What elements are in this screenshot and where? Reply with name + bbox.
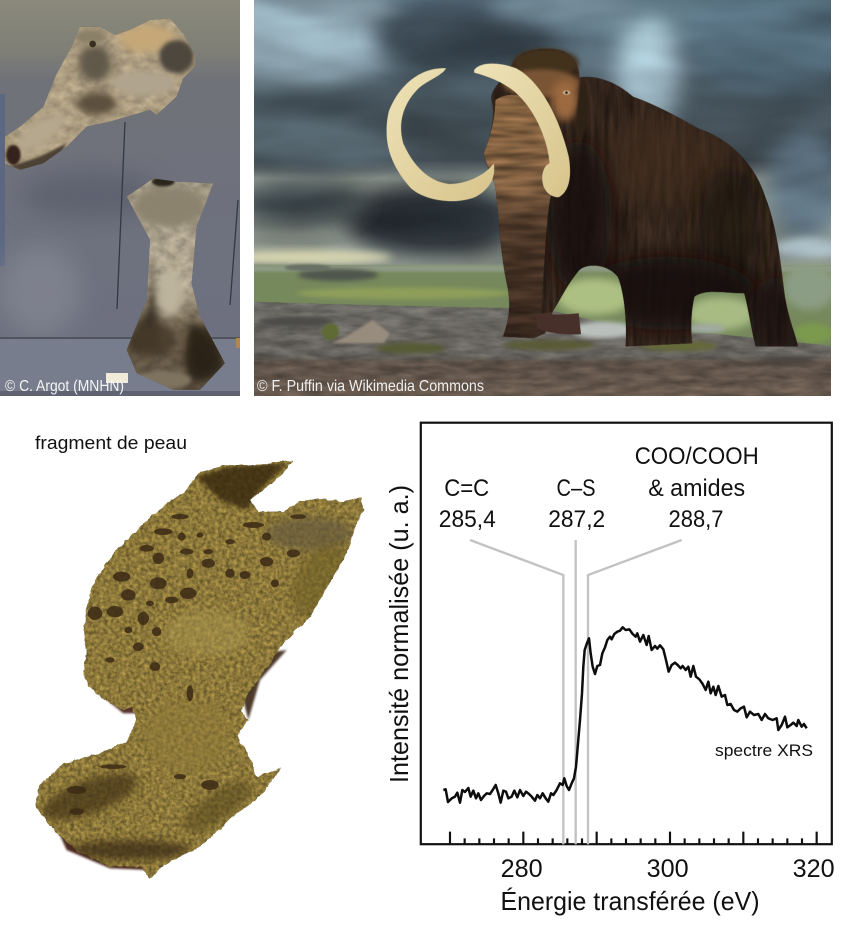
photo: skin fragment: [35, 460, 363, 878]
mammoth: trunk: [484, 95, 553, 338]
photo: woolly mammoth diorama: [254, 0, 831, 396]
photo: museum head and foot specimens: [0, 0, 240, 396]
x axis tick labels: 300: [647, 855, 689, 883]
x axis tick labels: 280: [501, 855, 543, 883]
credit: F. Puffin: © F. Puffin via Wikimedia Commons: [257, 378, 484, 395]
mammoth: head and eye: [503, 49, 589, 147]
peak labels: [439, 443, 759, 533]
x axis tick labels: [501, 855, 835, 883]
curve label: spectre XRS: [715, 741, 813, 760]
mammoth: left tusk: [386, 68, 494, 201]
y axis title: Intensité normalisée (u. a.): [384, 485, 414, 783]
x axis title: Énergie transférée (eV): [500, 886, 760, 916]
peak labels: & amides: [648, 475, 745, 502]
heading: fragment de peau: fragment de peau: [35, 433, 187, 453]
landscape: green tundra: [250, 263, 840, 352]
mammoth: body: [484, 49, 798, 347]
x axis tick labels: 320: [793, 855, 835, 883]
peak labels: 288,7: [668, 506, 724, 533]
peak marker lines: [470, 540, 682, 844]
peak labels: C–S: [556, 475, 596, 502]
mammoth: trunk tip: [535, 313, 581, 334]
credit: C. Argot: © C. Argot (MNHN): [5, 378, 124, 395]
foreground: rock ledge: [250, 302, 840, 400]
spectrum curve: [443, 627, 807, 803]
chart: XRS spectrum: [384, 423, 835, 916]
mammoth: right tusk: [474, 64, 570, 197]
specimen: mummified head: [5, 18, 195, 172]
specimen: mummified foot: [127, 177, 227, 390]
peak labels: 287,2: [548, 506, 605, 533]
label card: [106, 373, 128, 383]
chart frame: [421, 423, 832, 844]
peak labels: C=C: [444, 475, 489, 502]
skin: shading: [37, 463, 360, 860]
peak labels: 285,4: [439, 506, 496, 533]
x axis ticks: [450, 832, 817, 844]
skin: follicle pits: [67, 514, 306, 815]
peak labels: COO/COOH: [635, 443, 759, 470]
